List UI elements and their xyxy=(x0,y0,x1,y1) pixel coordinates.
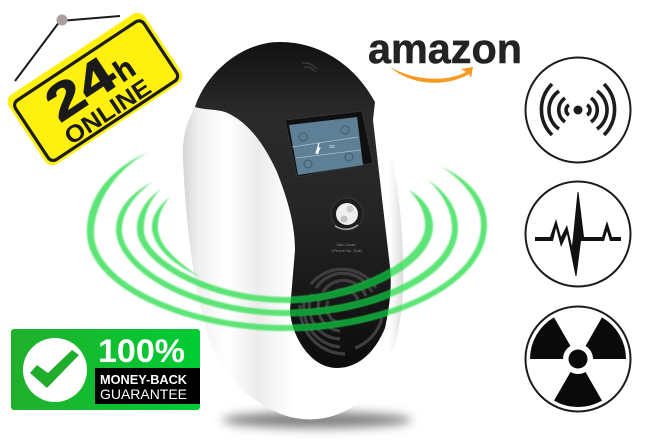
blue display xyxy=(289,117,363,175)
speaker grille xyxy=(300,269,382,354)
icon: radiation xyxy=(526,306,630,412)
icon: radio signal xyxy=(526,58,630,162)
black label: MONEY-BACK xyxy=(100,372,188,387)
ultrasonic green waves xyxy=(87,153,487,331)
second wave xyxy=(116,180,458,316)
ground shadow xyxy=(222,412,412,428)
black label: GUARANTEE xyxy=(100,386,187,402)
sign: 24h online xyxy=(4,9,186,169)
yellow sign board: 24 xyxy=(35,46,126,132)
hanger cord and pin xyxy=(15,14,120,81)
badge: money-back guarantee xyxy=(11,329,200,410)
panel small print: Like-Clean xyxy=(336,242,356,247)
icon: wifi mark on top xyxy=(302,63,317,72)
white body xyxy=(183,42,403,419)
blue display: ∞ xyxy=(329,142,335,151)
icon: check mark in circle xyxy=(23,338,87,402)
inner left wave xyxy=(152,197,200,277)
yellow sign board: h xyxy=(108,51,141,89)
panel small print xyxy=(332,242,363,253)
power button xyxy=(331,198,363,230)
black label xyxy=(95,368,200,404)
display frame xyxy=(285,111,373,177)
product: ultrasonic repeller device xyxy=(183,42,403,419)
yellow sign board xyxy=(4,9,186,169)
black front panel xyxy=(195,42,391,368)
panel small print: (Phone No. 3'ok) xyxy=(332,248,363,253)
third wave xyxy=(137,189,433,303)
icon: pulse wave xyxy=(526,182,630,286)
outer wave xyxy=(87,153,487,331)
green badge background xyxy=(11,329,200,410)
amazon logo: amazon xyxy=(368,25,522,72)
waves over black panel xyxy=(290,268,391,332)
yellow sign board: ONLINE xyxy=(60,74,156,151)
amazon smile arrow xyxy=(390,67,473,83)
100 percent: 100% xyxy=(98,333,185,369)
